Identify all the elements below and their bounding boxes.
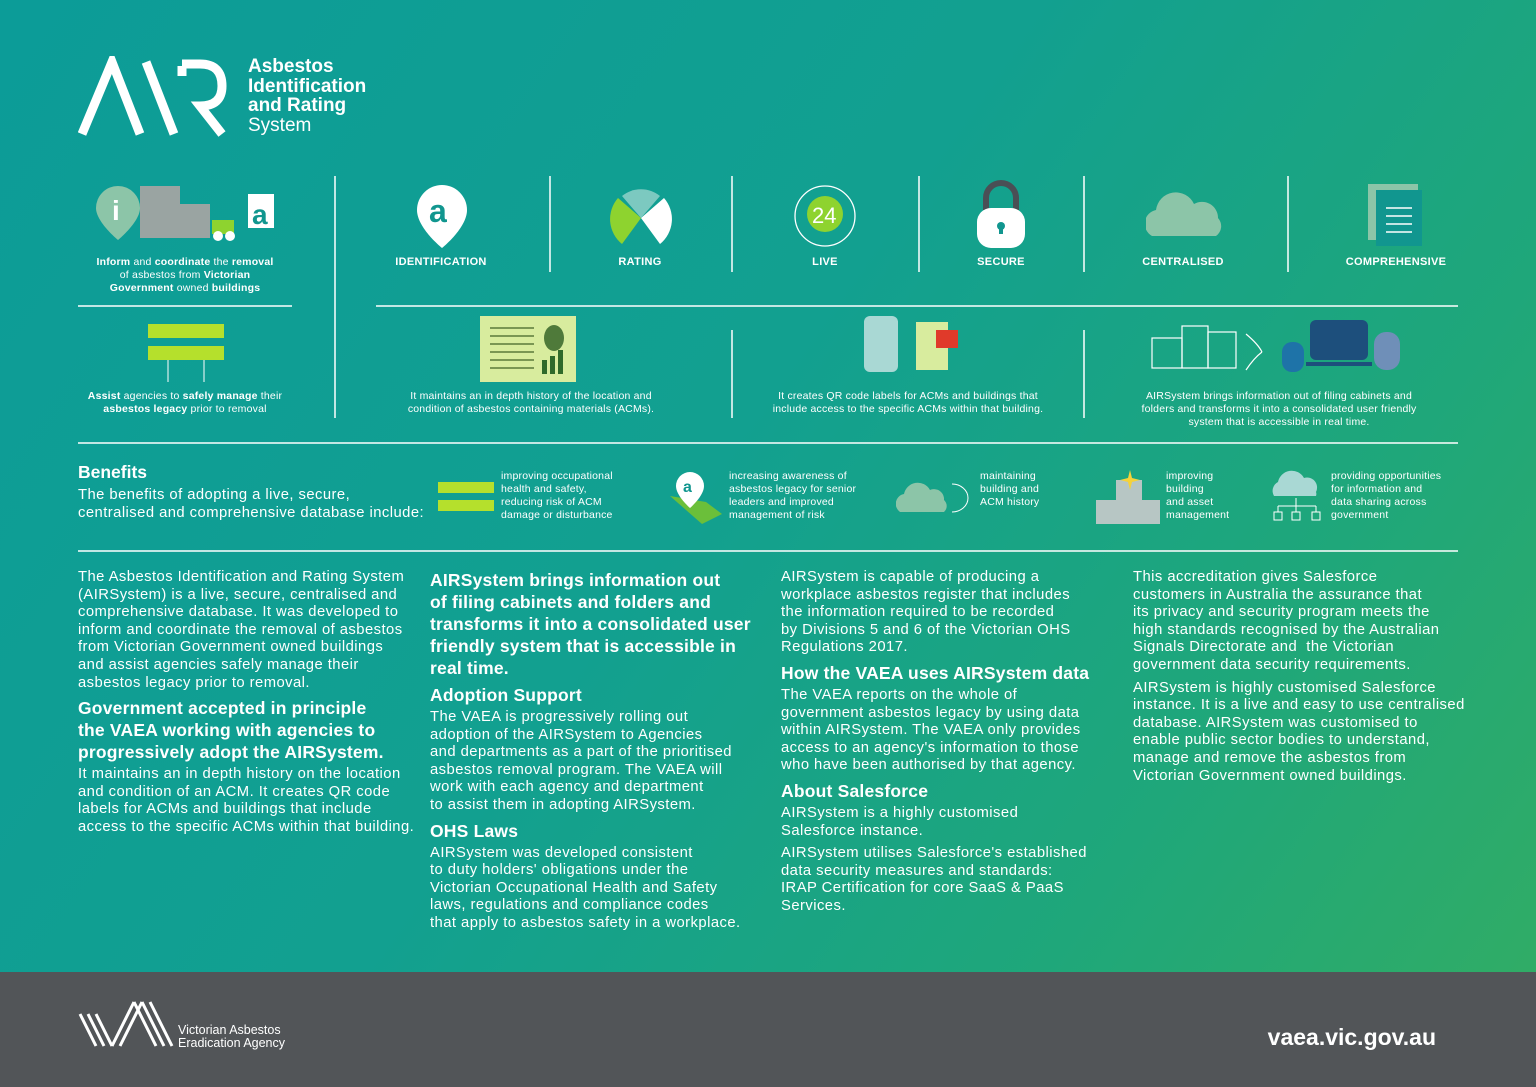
benefit: ohs: improving occupational: [501, 470, 613, 482]
benefit: asset: [1096, 470, 1229, 524]
column 1: comprehensive database. It was developed to: [78, 604, 398, 620]
column 4: manage and remove the asbestos from: [1133, 750, 1406, 766]
icon: qr: [864, 316, 958, 372]
text: filing: [1141, 390, 1417, 428]
column 1: Government accepted in principle: [78, 698, 366, 718]
column 4: government data security requirements.: [1133, 657, 1411, 673]
column 3: AIRSystem is a highly customised: [781, 805, 1018, 821]
benefits heading: centralised and comprehensive database include:: [78, 505, 424, 521]
logo: Identification: [248, 76, 366, 96]
benefit: ohs: health and safety,: [501, 483, 587, 495]
benefit: asset: management: [1166, 509, 1229, 521]
text: filing: system that is accessible in real time.: [1188, 416, 1370, 428]
column 2: friendly system that is accessible in: [430, 636, 736, 656]
benefit: asset: improving: [1166, 470, 1213, 482]
text: filing: folders and transforms it into a consolidated user friendly: [1141, 403, 1417, 415]
icon: cloud: [1146, 192, 1222, 236]
column 2: of filing cabinets and folders and: [430, 592, 711, 612]
column 2: and departments as a part of the prioritised: [430, 744, 732, 760]
benefit: history: [896, 470, 1040, 512]
column 1: It maintains an in depth history on the location: [78, 766, 401, 782]
column 2: [430, 570, 751, 931]
column 3: IRAP Certification for core SaaS & PaaS: [781, 880, 1064, 896]
icon: barrier: [148, 324, 224, 382]
benefits heading: [78, 462, 424, 521]
column 4: database. AIRSystem was customised to: [1133, 715, 1418, 731]
benefit: sharing: government: [1331, 509, 1388, 521]
column 3: [781, 569, 1090, 914]
icon: documents: [1368, 184, 1422, 246]
label: secure: SECURE: [977, 256, 1025, 268]
benefit: asset: building: [1166, 483, 1204, 495]
logo: and Rating: [248, 95, 346, 116]
icon: secure: [977, 180, 1025, 248]
column 1: inform and coordinate the removal of asbestos: [78, 622, 403, 638]
column 2: AIRSystem was developed consistent: [430, 845, 693, 861]
text: history: It maintains an in depth history of the location and: [410, 390, 652, 402]
column 3: AIRSystem is capable of producing a: [781, 569, 1039, 585]
column 4: its privacy and security program meets the: [1133, 604, 1430, 620]
benefits heading: Benefits: [78, 462, 147, 482]
footer logo: [78, 1001, 285, 1050]
benefit: history: ACM history: [980, 496, 1039, 508]
column 4: This accreditation gives Salesforce: [1133, 569, 1377, 585]
panel: inform icon: [96, 186, 274, 241]
column 3: About Salesforce: [781, 781, 928, 801]
column 3: within AIRSystem. The VAEA only provides: [781, 722, 1081, 738]
column 1: from Victorian Government owned buildings: [78, 639, 383, 655]
text: inform: Inform and coordinate the removal: [96, 256, 274, 268]
benefit: sharing: [1272, 470, 1441, 521]
column 2: AIRSystem brings information out: [430, 570, 720, 590]
benefit: ohs: [438, 470, 613, 521]
benefit: history: building and: [980, 483, 1039, 495]
logo: [78, 56, 366, 137]
benefit: awareness: management of risk: [729, 509, 825, 521]
column 4: customers in Australia the assurance that: [1133, 587, 1422, 603]
column 2: adoption of the AIRSystem to Agencies: [430, 727, 702, 743]
benefit: ohs: damage or disturbance: [501, 509, 613, 521]
text: qr: It creates QR code labels for ACMs and buildings that: [778, 390, 1038, 402]
column 2: Victorian Occupational Health and Safety: [430, 880, 718, 896]
column 1: labels for ACMs and buildings that include: [78, 801, 372, 817]
benefit: awareness: [670, 470, 856, 524]
logo: System: [248, 114, 311, 136]
column 4: Victorian Government owned buildings.: [1133, 768, 1407, 784]
column 3: access to an agency's information to those: [781, 740, 1079, 756]
text: qr: include access to the specific ACMs within that building.: [773, 403, 1043, 415]
text: assist: asbestos legacy prior to removal: [103, 403, 267, 415]
label: live: LIVE: [812, 256, 838, 268]
benefit: history: maintaining: [980, 470, 1036, 482]
column 3: by Divisions 5 and 6 of the Victorian OHS: [781, 622, 1071, 638]
column 2: asbestos removal program. The VAEA will: [430, 762, 723, 778]
column 1: (AIRSystem) is a live, secure, centralised and: [78, 587, 397, 603]
label: identification: IDENTIFICATION: [395, 256, 487, 268]
column 2: to assist them in adopting AIRSystem.: [430, 797, 696, 813]
column 3: AIRSystem utilises Salesforce's established: [781, 845, 1087, 861]
column 3: Services.: [781, 898, 846, 914]
column 2: real time.: [430, 658, 509, 678]
column 2: work with each agency and department: [430, 779, 704, 795]
column 3: who have been authorised by that agency.: [781, 757, 1076, 773]
benefit: asset: and asset: [1166, 496, 1213, 508]
column 4: AIRSystem is highly customised Salesforce: [1133, 680, 1436, 696]
icon: live: [794, 185, 856, 247]
text: inform: of asbestos from Victorian: [120, 269, 250, 281]
benefit: sharing: data sharing across: [1331, 496, 1426, 508]
benefit: ohs: reducing risk of ACM: [501, 496, 602, 508]
column 3: The VAEA reports on the whole of: [781, 687, 1017, 703]
column 3: government asbestos legacy by using data: [781, 705, 1080, 721]
column 1: access to the specific ACMs within that building.: [78, 819, 414, 835]
column 1: asbestos legacy prior to removal.: [78, 675, 310, 691]
column 4: high standards recognised by the Australian: [1133, 622, 1439, 638]
column 4: [1133, 569, 1465, 784]
benefit: awareness: increasing awareness of: [729, 470, 847, 482]
panel: inform icon: a: [252, 199, 268, 230]
column 3: Regulations 2017.: [781, 639, 908, 655]
icon: rating: [610, 189, 672, 244]
text: history: [408, 390, 654, 415]
text: history: condition of asbestos containing materials (ACMs).: [408, 403, 654, 415]
label: rating: RATING: [618, 256, 662, 268]
column 1: The Asbestos Identification and Rating System: [78, 569, 404, 585]
benefit: awareness: asbestos legacy for senior: [729, 483, 856, 495]
benefits heading: The benefits of adopting a live, secure,: [78, 487, 350, 503]
label: centralised: CENTRALISED: [1142, 256, 1224, 268]
column 3: Salesforce instance.: [781, 823, 923, 839]
column 2: to duty holders' obligations under the: [430, 862, 688, 878]
column 2: The VAEA is progressively rolling out: [430, 709, 688, 725]
benefit: sharing: providing opportunities: [1331, 470, 1441, 482]
column 2: transforms it into a consolidated user: [430, 614, 751, 634]
footer url: vaea.vic.gov.au: [1268, 1024, 1436, 1050]
column 3: the information required to be recorded: [781, 604, 1054, 620]
footer: [0, 972, 1536, 1087]
benefit: awareness: a: [683, 479, 692, 496]
column 2: OHS Laws: [430, 821, 518, 841]
column 1: the VAEA working with agencies to: [78, 720, 375, 740]
panel: inform icon: i: [112, 195, 120, 226]
footer logo: Eradication Agency: [178, 1036, 285, 1050]
text: qr: [773, 390, 1043, 415]
text: assist: Assist agencies to safely manage their: [88, 390, 282, 402]
column 4: instance. It is a live and easy to use centralised: [1133, 697, 1465, 713]
column 3: How the VAEA uses AIRSystem data: [781, 663, 1089, 683]
text: assist: [88, 390, 282, 415]
text: inform: [96, 256, 274, 294]
footer logo: Victorian Asbestos: [178, 1023, 281, 1037]
icon: live: 24: [812, 203, 836, 228]
column 3: workplace asbestos register that includes: [781, 587, 1070, 603]
logo: Asbestos: [248, 56, 334, 77]
column 1: and condition of an ACM. It creates QR code: [78, 784, 390, 800]
icon: filing to system: [1151, 320, 1400, 372]
icon: identification: [417, 185, 467, 248]
text: inform: Government owned buildings: [110, 282, 260, 294]
column 3: data security measures and standards:: [781, 863, 1053, 879]
column 1: and assist agencies safely manage their: [78, 657, 359, 673]
column 2: that apply to asbestos safety in a workplace.: [430, 915, 741, 931]
text: filing: AIRSystem brings information out of filing cabinets and: [1146, 390, 1412, 402]
column 1: [78, 569, 414, 835]
column 4: Signals Directorate and the Victorian: [1133, 639, 1394, 655]
column 4: enable public sector bodies to understand,: [1133, 732, 1430, 748]
column 2: laws, regulations and compliance codes: [430, 897, 709, 913]
label: comprehensive: COMPREHENSIVE: [1346, 256, 1446, 268]
icon: report: [480, 316, 576, 382]
column 2: Adoption Support: [430, 685, 582, 705]
column 1: progressively adopt the AIRSystem.: [78, 742, 384, 762]
benefit: sharing: for information and: [1331, 483, 1422, 495]
icon: identification: a: [429, 193, 447, 229]
benefit: awareness: leaders and improved: [729, 496, 834, 508]
